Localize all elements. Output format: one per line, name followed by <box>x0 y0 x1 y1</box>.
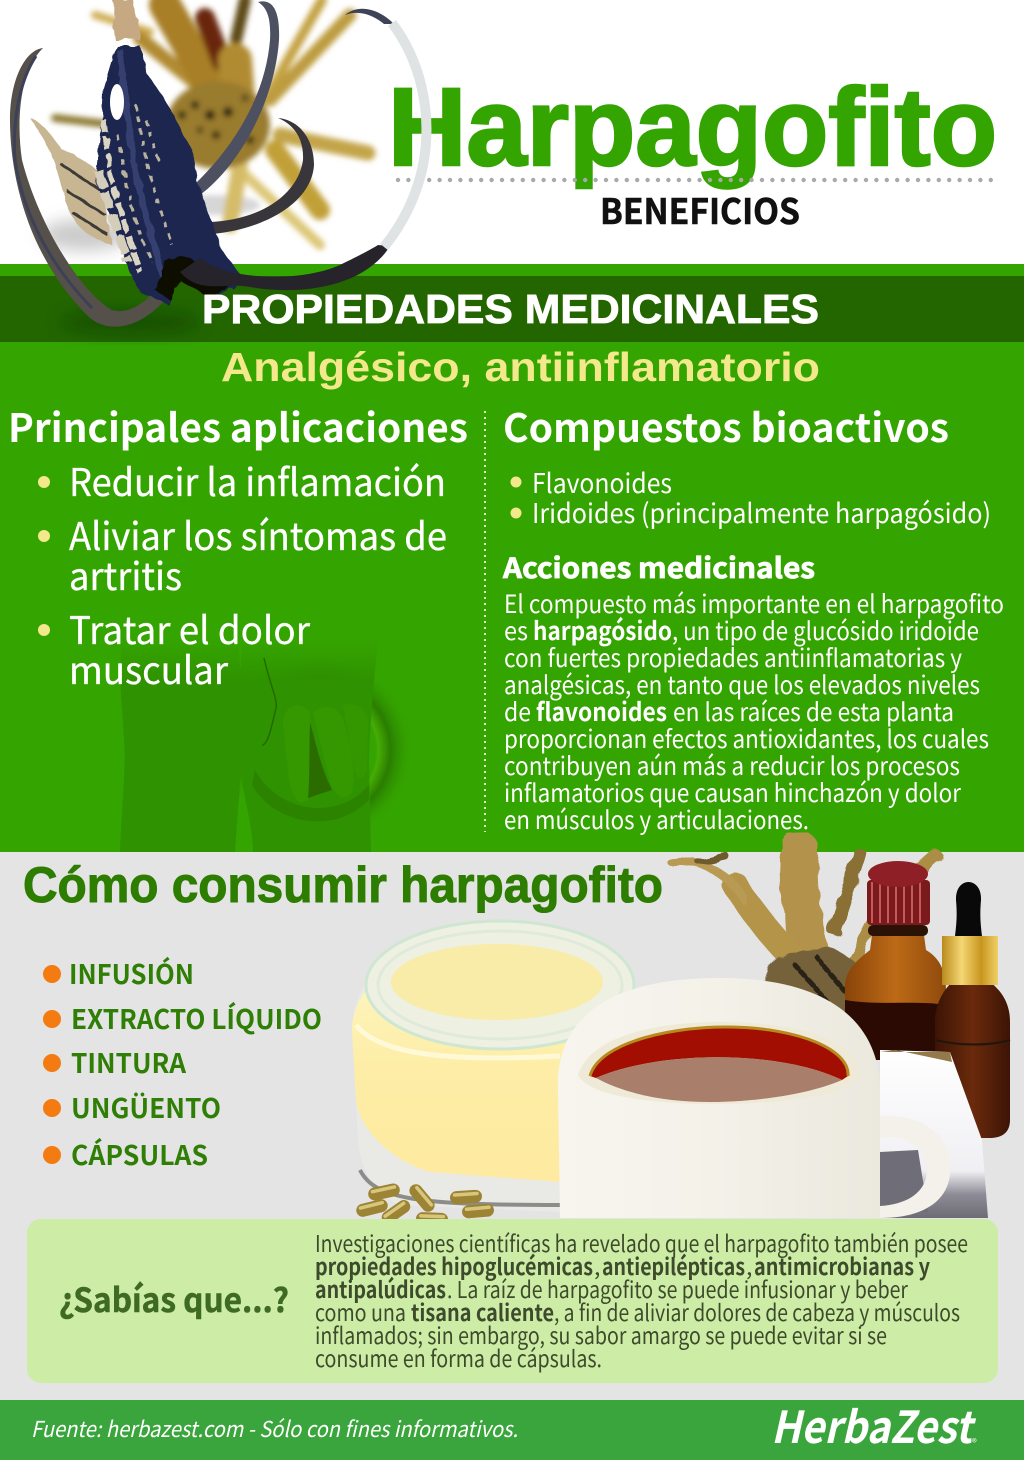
footer <box>0 1392 1024 1460</box>
stem <box>113 0 139 40</box>
callout text: inflamados; sin embargo, su sabor amargo se puede evitar si se <box>315 1317 887 1351</box>
dotted column divider <box>484 411 486 832</box>
heading: Compuestos bioactivos: Compuestos bioactivos <box>503 398 949 454</box>
text block: medicinal actions: es <box>504 612 528 648</box>
callout text: , <box>594 1248 600 1282</box>
illustration: dropper bottle <box>935 882 1010 1138</box>
applications list: Reducir la inflamación <box>69 452 446 507</box>
callout text: antimicrobianas y <box>754 1248 930 1282</box>
text block: medicinal actions: harpagósido <box>533 612 672 648</box>
dotted rule under title <box>398 178 993 182</box>
list: forms of consumption: EXTRACTO LÍQUIDO <box>71 998 322 1037</box>
column: bioactive compounds <box>502 398 1004 837</box>
callout text: tisana caliente <box>411 1294 554 1328</box>
right claw base <box>180 245 390 290</box>
callout text <box>315 1225 968 1374</box>
subtitle: BENEFICIOS: BENEFICIOS <box>600 184 800 235</box>
callout text: . La raíz de harpagofito se puede infusionar y beber <box>447 1271 908 1305</box>
applications list: Tratar el dolor <box>69 600 310 655</box>
applications list: artritis <box>69 546 182 601</box>
text block: medicinal actions: inflamatorios que causan hinchazón y dolor <box>504 774 961 810</box>
tan side pod <box>30 118 112 245</box>
text block: medicinal actions: en las raíces de esta planta <box>673 693 954 729</box>
left claw <box>10 48 172 327</box>
applications list <box>38 452 447 695</box>
shadow under pod <box>60 310 200 334</box>
callout text: antiepilépticas <box>602 1248 745 1282</box>
callout text: como una <box>315 1294 406 1328</box>
top claw <box>196 1 279 195</box>
heading: PROPIEDADES MEDICINALES: PROPIEDADES MEDICINALES <box>202 286 819 332</box>
panel: how to consume <box>0 852 1024 1400</box>
shadow on white <box>40 219 130 251</box>
inner claw <box>210 118 314 234</box>
text block: medicinal actions: en músculos y articulaciones. <box>504 801 809 837</box>
callout text: , <box>746 1248 752 1282</box>
text block: medicinal actions: de <box>504 693 531 729</box>
text block: medicinal actions: flavonoides <box>536 693 667 729</box>
callout text: , a fin de aliviar dolores de cabeza y músculos <box>554 1294 960 1328</box>
illustration: amber bottle with red cap <box>845 861 946 1060</box>
icon: devil's claw seed pod <box>10 0 426 334</box>
heading: Cómo consumir harpagofito: Cómo consumir harpagofito <box>23 857 663 913</box>
illustration: ointment jar <box>352 921 634 1212</box>
list: forms of consumption: INFUSIÓN <box>69 953 194 992</box>
text block: medicinal actions: contribuyen aún más a reducir los procesos <box>504 747 960 783</box>
logo: HerbaZest: HerbaZest <box>771 1392 977 1456</box>
callout text: propiedades hipoglucémicas <box>315 1248 593 1282</box>
subheading: Analgésico, antiinflamatorio: Analgésico, antiinflamatorio <box>221 344 820 390</box>
callout: did you know <box>27 1219 998 1383</box>
list: forms of consumption: TINTURA <box>71 1042 187 1081</box>
list: forms of consumption: UNGÜENTO <box>71 1087 221 1126</box>
icon: blurred harpagophytum root <box>55 0 368 245</box>
compounds list <box>510 462 991 531</box>
compounds list: Iridoides (principalmente harpagósido) <box>532 492 991 531</box>
list: forms of consumption <box>43 953 322 1173</box>
heading: Harpagofito: Harpagofito <box>388 66 997 189</box>
illustration: capsules <box>355 1182 495 1227</box>
text block: medicinal actions: con fuertes propiedades antiinflamatorias y <box>504 639 962 675</box>
pod body <box>95 46 246 304</box>
compounds list: Flavonoides <box>532 462 672 501</box>
column: main applications <box>8 398 468 695</box>
illustration: tea bag <box>876 1050 988 1218</box>
panel: green medicinal properties <box>0 264 1024 852</box>
list: forms of consumption: CÁPSULAS <box>71 1134 208 1173</box>
heading: Principales aplicaciones: Principales aplicaciones <box>8 398 468 454</box>
heading: Acciones medicinales: Acciones medicinales <box>502 547 815 587</box>
callout heading: ¿Sabías que...? <box>59 1274 289 1322</box>
text block: medicinal actions: analgésicas, en tanto que los elevados niveles <box>504 666 980 702</box>
illustration: root behind products <box>672 850 935 1023</box>
text block: medicinal actions <box>504 585 1004 837</box>
callout text: antipalúdicas <box>315 1271 446 1305</box>
applications list: muscular <box>69 640 228 695</box>
applications list: Aliviar los síntomas de <box>69 506 447 561</box>
registered mark: ® <box>972 1434 977 1449</box>
callout text: consume en forma de cápsulas. <box>315 1340 602 1374</box>
text block: medicinal actions: , un tipo de glucósido iridoide <box>672 612 979 648</box>
illustration: tea cup <box>558 978 951 1218</box>
source note: Fuente: herbazest.com - Sólo con fines informativos. <box>31 1412 518 1444</box>
illustration: knee and hand in pain <box>120 640 414 852</box>
